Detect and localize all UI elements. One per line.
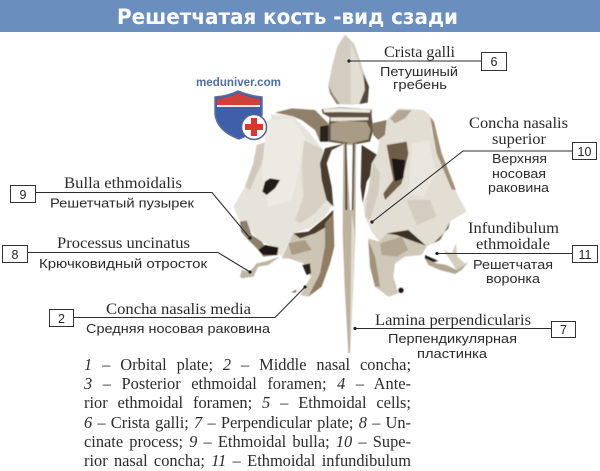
label 6: Crista galli: 6 bbox=[491, 55, 498, 69]
label 10: Concha nasalis superior: 10 bbox=[578, 145, 591, 159]
left middle concha bbox=[282, 210, 334, 297]
title banner bbox=[0, 0, 600, 32]
label 9: Bulla ethmoidalis: Решетчатый пузырек bbox=[50, 196, 194, 210]
label 8: Processus uncinatus: Processus uncinatus bbox=[57, 235, 190, 252]
illustration: ethmoid bone, posterior view bbox=[233, 35, 468, 353]
label 10: Concha nasalis superior: superior bbox=[492, 131, 547, 148]
label 8: Processus uncinatus: 8 bbox=[12, 248, 19, 262]
label 11: Infundibulum ethmoidale: Решетчатая bbox=[473, 257, 553, 272]
label 10: Concha nasalis superior bbox=[370, 115, 596, 224]
label 7: Lamina perpendicularis bbox=[353, 312, 576, 361]
label 8: Processus uncinatus bbox=[2, 235, 252, 274]
caption: numbered legend: rior nasal concha; 11 – Ethmoidal infundibulum bbox=[84, 451, 411, 470]
label 9: Bulla ethmoidalis: 9 bbox=[20, 188, 27, 202]
label 10: Concha nasalis superior: носовая bbox=[492, 166, 546, 181]
caption: numbered legend: cinate process; 9 – Ethmoidal bulla; 10 – Supe- bbox=[84, 432, 411, 451]
label 11: Infundibulum ethmoidale bbox=[435, 220, 598, 286]
logo: meduniver.com: meduniver.com bbox=[196, 77, 281, 89]
label 7: Lamina perpendicularis: пластинка bbox=[417, 346, 488, 361]
label 6: Crista galli: гребень bbox=[393, 77, 447, 92]
label 2: Concha nasalis media: 2 bbox=[58, 312, 65, 326]
caption: numbered legend bbox=[84, 355, 411, 470]
label 11: Infundibulum ethmoidale: ethmoidale bbox=[476, 236, 550, 253]
label 10: Concha nasalis superior: Верхняя bbox=[492, 151, 547, 166]
left uncinate process bbox=[240, 257, 280, 278]
label 7: Lamina perpendicularis: 7 bbox=[560, 323, 567, 337]
label 2: Concha nasalis media: Concha nasalis media bbox=[106, 301, 251, 318]
logo: meduniver.com bbox=[196, 77, 281, 140]
label 10: Concha nasalis superior: Concha nasalis bbox=[469, 115, 568, 132]
right ethmoidal infundibulum bbox=[424, 243, 468, 274]
perpendicular plate bbox=[343, 143, 356, 353]
label 10: Concha nasalis superior: раковина bbox=[488, 180, 550, 195]
right lateral mass bbox=[361, 108, 467, 247]
label 7: Lamina perpendicularis: Перпендикулярная bbox=[388, 331, 517, 346]
label 6: Crista galli: Crista galli bbox=[384, 44, 456, 61]
label 2: Concha nasalis media bbox=[50, 285, 307, 336]
caption: numbered legend: rior ethmoidal foramen; 5 – Ethmoidal cells; bbox=[84, 393, 411, 412]
cribriform plate and central arch bbox=[322, 107, 373, 145]
label 6: Crista galli: Петушиный bbox=[380, 64, 458, 79]
label 11: Infundibulum ethmoidale: Infundibulum bbox=[468, 220, 560, 237]
label 6: Crista galli bbox=[347, 44, 506, 92]
title banner: Решетчатая кость -вид сзади bbox=[117, 5, 458, 29]
right middle concha bbox=[368, 230, 427, 297]
label 11: Infundibulum ethmoidale: 11 bbox=[579, 248, 592, 262]
caption: numbered legend: 1 – Orbital plate; 2 – Middle nasal concha; bbox=[84, 355, 411, 374]
label 2: Concha nasalis media: Средняя носовая раковина bbox=[86, 321, 271, 336]
caption: numbered legend: 6 – Crista galli; 7 – Perpendicular plate; 8 – Un- bbox=[84, 413, 411, 432]
left lateral mass bbox=[233, 108, 345, 257]
label 11: Infundibulum ethmoidale: воронка bbox=[486, 271, 541, 286]
crista galli bbox=[328, 35, 369, 105]
icon: shield with medical cross bbox=[215, 91, 266, 140]
label 9: Bulla ethmoidalis: Bulla ethmoidalis bbox=[64, 175, 182, 192]
label 9: Bulla ethmoidalis bbox=[10, 175, 252, 240]
label 8: Processus uncinatus: Крючковидный отросток bbox=[39, 256, 207, 271]
caption: numbered legend: 3 – Posterior ethmoidal foramen; 4 – Ante- bbox=[84, 374, 411, 393]
label 7: Lamina perpendicularis: Lamina perpendicularis bbox=[375, 312, 531, 329]
